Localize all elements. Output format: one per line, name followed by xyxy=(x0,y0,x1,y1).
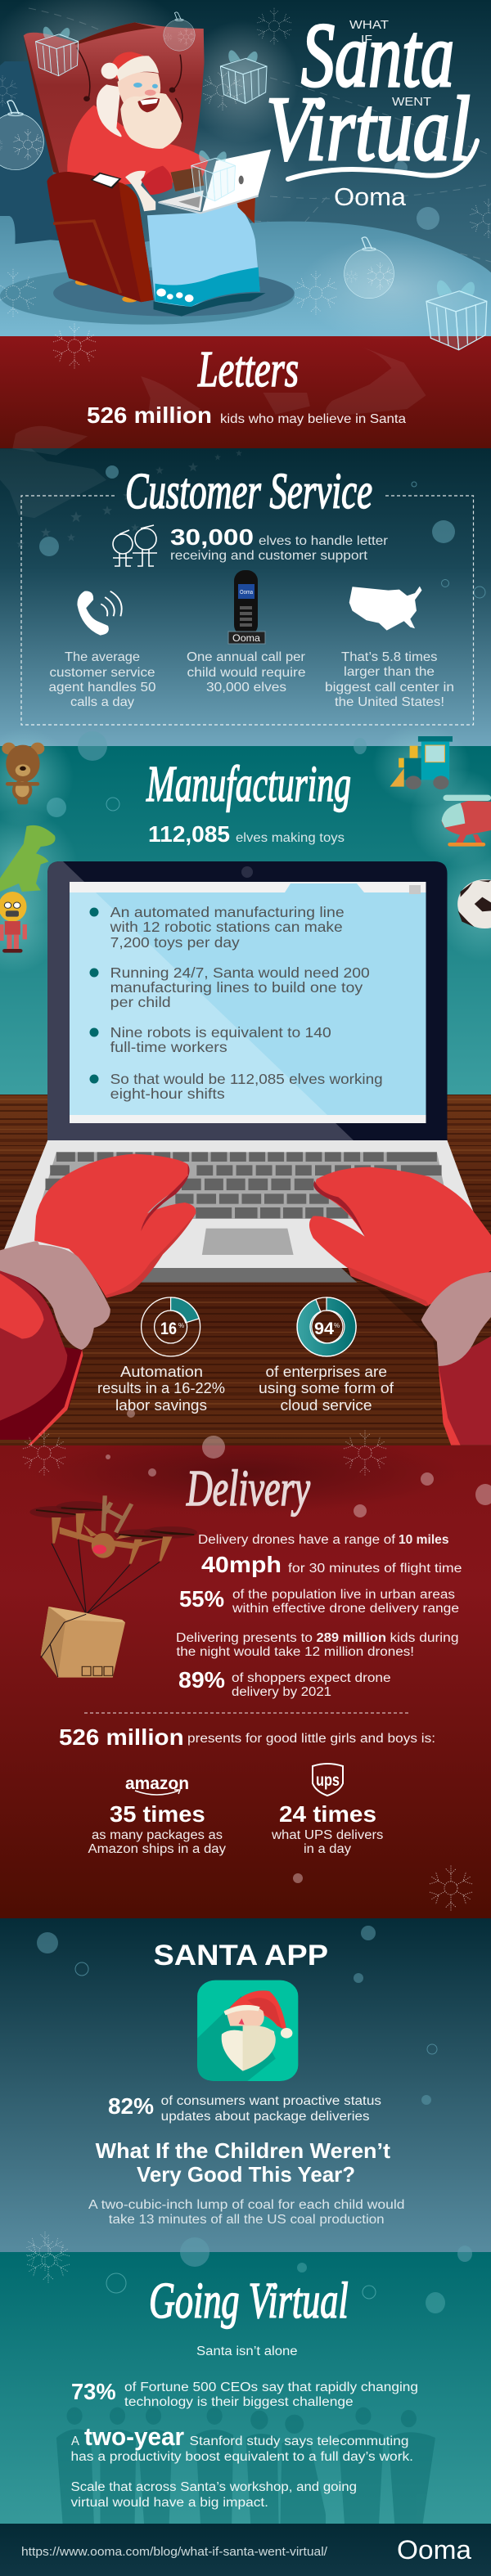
laptop keyboard xyxy=(0,1140,491,1366)
footer xyxy=(21,2535,471,2565)
logo: Ooma footer: Ooma xyxy=(397,2535,471,2565)
bubbles xyxy=(39,465,485,761)
text: biggest call center: biggest call center in xyxy=(325,681,454,695)
feet xyxy=(75,279,137,303)
subheading: what if the children: What If the Children Weren’t xyxy=(96,2138,390,2163)
stat: drone range: Delivery drones have a range of xyxy=(198,1533,396,1547)
background: delivery red panel xyxy=(0,1432,491,1918)
title: What if: IF xyxy=(361,33,372,47)
title: What if xyxy=(349,18,389,47)
stat: 35 times amazon: 35 times xyxy=(110,1801,205,1827)
stat: 526 million: 526 million xyxy=(87,402,212,428)
section: manufacturing xyxy=(0,724,491,1445)
donut: 16 percent: % xyxy=(178,1322,184,1329)
light glows xyxy=(0,0,303,241)
antlers xyxy=(103,1495,132,1532)
sleigh silhouette and star trail xyxy=(0,448,242,548)
donut: 94 percent: 94 xyxy=(314,1319,334,1338)
smartphone xyxy=(90,173,121,189)
bullet 3: Nine robots is equivalent to 140 xyxy=(110,1024,331,1041)
stat: 55 percent: of the population live in urban areas xyxy=(232,1588,455,1602)
stat: 30,000 elves: 30,000 xyxy=(170,524,254,550)
section: santa app xyxy=(26,1926,472,2272)
snowflake xyxy=(27,2237,70,2284)
bullet 2: Running 24/7, Santa would need 200 xyxy=(110,964,370,981)
stat: 289 million: 289 million xyxy=(316,1631,386,1645)
bezel xyxy=(47,861,447,1140)
stat: 35 times amazon: Amazon ships in a day xyxy=(88,1842,226,1856)
screen xyxy=(70,882,426,1123)
text: annual call per child: One annual call per xyxy=(187,650,306,664)
background: footer band xyxy=(0,2524,491,2576)
stat: 24 times UPS: in a day xyxy=(304,1842,351,1856)
stat: 35 times amazon xyxy=(88,1801,226,1856)
dashed frame xyxy=(21,496,473,725)
stat: 82 percent xyxy=(108,2093,381,2124)
text: lump of coal: take 13 minutes of all the US coal production xyxy=(109,2213,385,2227)
stat: 40mph: 40mph xyxy=(201,1552,282,1577)
text: average agent calls: agent handles 50 xyxy=(49,681,156,695)
subheading: what if the children: Very Good This Year? xyxy=(137,2162,355,2187)
heading: Letters: Letters xyxy=(197,342,299,398)
stat: drone range: 10 miles xyxy=(399,1533,448,1547)
stat: two-year study xyxy=(70,2422,413,2464)
text: average agent calls xyxy=(49,650,156,709)
stat: 24 times UPS: 24 times xyxy=(279,1801,376,1827)
section: customer service xyxy=(0,448,485,761)
left sleeve xyxy=(0,1266,83,1445)
title swash xyxy=(288,141,477,179)
text: annual call per child: child would require xyxy=(187,666,306,680)
stat: 289 million: Delivering presents to xyxy=(176,1631,313,1645)
text: biggest call center: the United States! xyxy=(335,695,444,709)
stat: 24 times UPS xyxy=(271,1801,384,1856)
santa face xyxy=(222,1990,292,2071)
right cuff xyxy=(421,1272,491,1366)
stat: 30,000 elves xyxy=(170,524,389,563)
text: biggest call center: larger than the xyxy=(344,665,435,679)
donut: 94 percent: % xyxy=(334,1322,340,1329)
subheading: what if the children xyxy=(96,2138,390,2187)
source url: https://www.ooma.com/blog/what-if-santa-went-virtual/ xyxy=(21,2546,328,2559)
santa's mittens and sleeves xyxy=(0,1154,491,1445)
icon: ringing phone xyxy=(77,591,122,636)
blanket xyxy=(147,203,266,317)
bubbles xyxy=(26,1926,472,2272)
stat: 112,085 elves: elves making toys xyxy=(236,831,345,845)
text: annual call per child xyxy=(187,650,306,695)
heading: Delivery: Delivery xyxy=(186,1461,310,1517)
bullet 1 xyxy=(90,904,345,951)
background: manufacturing wall xyxy=(0,746,491,1095)
stat: two-year study: two-year xyxy=(84,2422,184,2451)
heading: Manufacturing: Manufacturing xyxy=(146,757,351,812)
background: customer service panel xyxy=(0,448,491,746)
drone reindeer with package xyxy=(29,1495,197,1678)
toy: teddy bear xyxy=(2,743,44,804)
stat: 112,085 elves: 112,085 xyxy=(148,821,230,847)
stat: two-year study: Stanford study says telecommuting xyxy=(190,2434,408,2448)
text: lump of coal: A two-cubic-inch lump of coal for each child would xyxy=(88,2198,404,2212)
dashed sky arcs xyxy=(29,8,491,262)
floating baubles, gifts, snowflakes xyxy=(0,7,491,370)
background: going virtual panel xyxy=(0,2252,491,2524)
bubbles and snowflakes xyxy=(23,1409,491,1912)
logo: amazon: amazon xyxy=(125,1774,189,1793)
stat: 73 percent xyxy=(71,2379,418,2409)
stat: 55 percent: within effective drone delivery range xyxy=(232,1602,459,1616)
section: letters xyxy=(12,342,426,456)
armchair arm xyxy=(47,172,154,302)
package xyxy=(41,1607,125,1678)
stat: 73 percent: 73% xyxy=(71,2379,116,2404)
heading: Santa App: SANTA APP xyxy=(154,1940,328,1971)
background: hero sky xyxy=(0,0,491,336)
icon: USA map xyxy=(349,587,421,631)
stat: 89 percent: delivery by 2021 xyxy=(232,1685,331,1699)
left cuff xyxy=(0,1241,110,1350)
right chair arm xyxy=(236,197,255,223)
bullet 4: So that would be 112,085 elves working xyxy=(110,1071,383,1087)
section: delivery xyxy=(23,1409,491,1912)
stat: 55 percent xyxy=(179,1586,459,1616)
bubbles xyxy=(106,2263,445,2313)
bullet 3: full-time workers xyxy=(110,1039,227,1055)
text: average agent calls: customer service xyxy=(49,666,155,680)
text: enterprises xyxy=(259,1364,394,1414)
stat: 82 percent: of consumers want proactive status xyxy=(161,2094,381,2108)
bullet 1: 7,200 toys per day xyxy=(110,934,240,951)
cords xyxy=(52,1540,160,1614)
stat: 89 percent: 89% xyxy=(178,1667,225,1693)
armchair back xyxy=(24,22,205,180)
red suit xyxy=(67,105,208,186)
donut: 16 percent: 16 xyxy=(160,1319,177,1338)
toy: soccer ball xyxy=(457,879,491,928)
left mitten xyxy=(34,1154,196,1298)
text: average agent calls: The average xyxy=(65,650,140,664)
stat: 526 million: kids who may believe in Santa xyxy=(220,412,406,426)
toy glows xyxy=(0,724,491,973)
bullet 4: eight-hour shifts xyxy=(110,1086,225,1102)
drone body xyxy=(52,1513,172,1564)
logo: UPS xyxy=(313,1764,343,1796)
title: What if: WHAT xyxy=(349,18,389,32)
text: enterprises: of enterprises are xyxy=(265,1364,387,1380)
stat: 112,085 elves xyxy=(148,821,345,847)
text: scale across workshop: Scale that across Santa’s workshop, and going xyxy=(70,2480,357,2494)
text: biggest call center xyxy=(325,650,454,709)
bubbles xyxy=(47,798,119,817)
stat: 30,000 elves: elves to handle letter xyxy=(259,534,389,548)
stat: 35 times amazon: as many packages as xyxy=(92,1828,223,1842)
text: lump of coal xyxy=(88,2198,404,2227)
toy: dinosaur xyxy=(0,825,56,892)
stat: 30,000 elves: receiving and customer support xyxy=(170,549,368,563)
right mitten xyxy=(309,1167,491,1306)
stat: 526 million xyxy=(87,402,406,428)
text: scale across workshop: virtual would have a big impact. xyxy=(70,2496,268,2510)
laptop screen xyxy=(47,861,447,1140)
heading: Going Virtual: Going Virtual xyxy=(149,2273,349,2329)
text: biggest call center: That’s 5.8 times xyxy=(341,650,437,664)
text: scale across workshop xyxy=(70,2480,357,2510)
business people silhouettes xyxy=(56,2407,435,2524)
stat: 55 percent: 55% xyxy=(179,1586,224,1612)
santa in armchair xyxy=(24,22,271,317)
background: letters red band xyxy=(0,336,491,448)
text: enterprises: cloud service xyxy=(280,1397,372,1414)
bullet 2: per child xyxy=(110,994,171,1010)
stat: 82 percent: 82% xyxy=(108,2093,154,2119)
icon: Ooma handset xyxy=(228,570,265,644)
stat: 526 million presents: 526 million xyxy=(59,1724,184,1750)
toy: robot xyxy=(0,892,27,953)
stat: 89 percent xyxy=(178,1667,391,1699)
stat: 40mph xyxy=(201,1552,462,1577)
stat: 40mph: for 30 minutes of flight time xyxy=(288,1562,462,1576)
laptop xyxy=(158,150,271,214)
text: automation xyxy=(97,1364,225,1414)
title: went: WENT xyxy=(392,95,431,109)
stat: 73 percent: of Fortune 500 CEOs say that rapidly changing xyxy=(124,2380,418,2394)
app icon xyxy=(197,1980,298,2081)
text: enterprises: using some form of xyxy=(259,1380,394,1396)
reindeer silhouettes xyxy=(12,346,426,456)
bullet 3 xyxy=(90,1024,331,1055)
text: Santa isn't alone: Santa isn’t alone xyxy=(196,2344,298,2358)
bullet 1: with 12 robotic stations can make xyxy=(110,919,343,935)
icon: Ooma handset: Ooma xyxy=(232,632,260,644)
text: automation: labor savings xyxy=(115,1397,207,1414)
toy: helicopter xyxy=(442,795,491,847)
icon: Ooma handset: Ooma xyxy=(240,590,253,596)
heading: Customer Service: Customer Service xyxy=(125,464,372,519)
stat: 526 million presents: presents for good little girls and boys is: xyxy=(187,1732,435,1746)
background: wooden desk xyxy=(0,1095,491,1445)
title block xyxy=(266,5,477,211)
stat: 24 times UPS: what UPS delivers xyxy=(271,1828,384,1842)
stat: 73 percent: technology is their biggest challenge xyxy=(124,2395,354,2409)
logo: Ooma: Ooma xyxy=(334,182,407,211)
stat: 289 million xyxy=(176,1631,458,1659)
rotors xyxy=(29,1501,197,1541)
stat: 289 million: the night would take 12 million drones! xyxy=(177,1645,414,1659)
stat: 526 million presents xyxy=(59,1724,435,1750)
beard and head xyxy=(97,52,182,149)
section: going virtual xyxy=(27,2237,445,2524)
logo: UPS: ups xyxy=(316,1771,340,1790)
stat: 89 percent: of shoppers expect drone xyxy=(232,1671,391,1685)
bullet 2: manufacturing lines to build one toy xyxy=(110,979,363,996)
stat: two-year study: has a productivity boost equivalent to a full day’s work. xyxy=(70,2450,413,2464)
text: average agent calls: calls a day xyxy=(70,695,134,709)
right sleeve xyxy=(439,1336,491,1445)
background: santa app panel xyxy=(0,1918,491,2252)
floor xyxy=(0,61,491,341)
toy: train xyxy=(390,736,453,789)
stat: 82 percent: updates about package deliveries xyxy=(161,2110,370,2124)
bullet 2 xyxy=(90,964,370,1010)
donut: 16 percent xyxy=(142,1297,200,1356)
text: annual call per child: 30,000 elves xyxy=(206,681,286,695)
stat: 289 million: kids during xyxy=(390,1631,458,1645)
stat: two-year study: A xyxy=(71,2434,80,2448)
icon: elves xyxy=(113,525,157,566)
text: automation: Automation xyxy=(120,1364,203,1380)
bullet 1: An automated manufacturing line xyxy=(110,904,345,920)
cuff, mitten and belt xyxy=(125,166,205,211)
donut: 94 percent xyxy=(297,1297,356,1356)
bullet 4 xyxy=(90,1071,383,1102)
text: automation: results in a 16-22% xyxy=(97,1380,225,1396)
hero illustration xyxy=(0,0,491,370)
